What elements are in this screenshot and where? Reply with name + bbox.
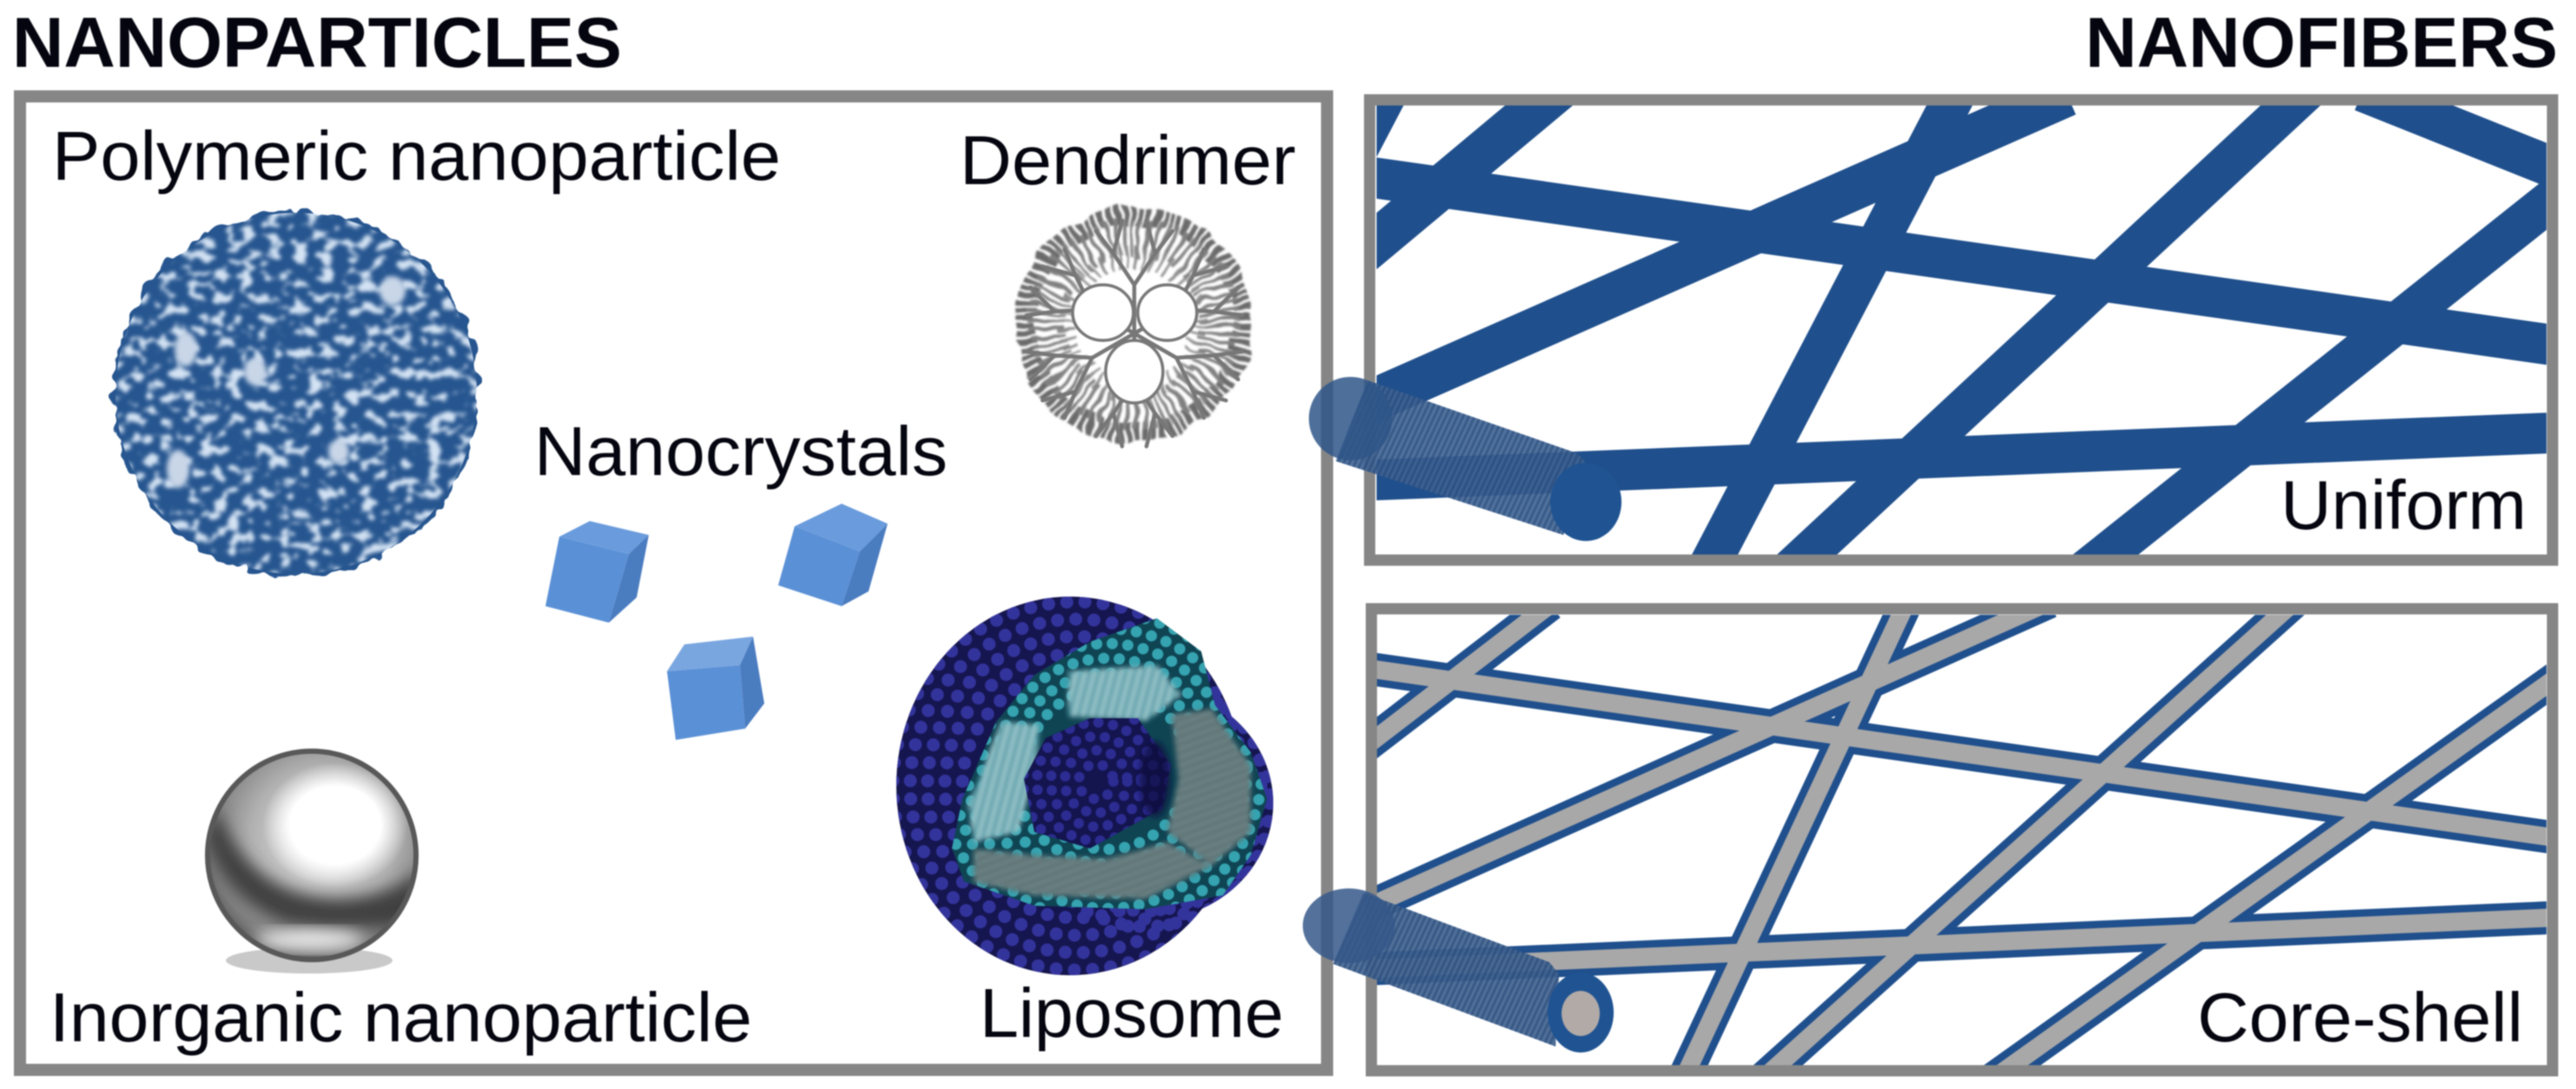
label: uniform: Uniform xyxy=(2281,466,2526,544)
label: dendrimer: Dendrimer xyxy=(960,122,1296,199)
label: inorganic nanoparticle: Inorganic nanoparticle xyxy=(50,979,752,1056)
fiber mesh: core-shell core xyxy=(1376,614,2547,1066)
icon: nanocrystal cube 2 xyxy=(778,504,888,606)
dendrimer branch: lower right xyxy=(1115,300,1252,423)
label: core-shell: Core-shell xyxy=(2197,979,2523,1056)
icon: liposome xyxy=(886,591,1285,981)
heading: nanoparticles: NANOPARTICLES xyxy=(12,3,622,82)
dendrimer branch: top xyxy=(1096,221,1172,333)
fiber mesh: uniform xyxy=(1376,104,2547,556)
icon: polymeric nanoparticle sphere xyxy=(109,204,484,583)
dendrimer core: right lobe xyxy=(1138,285,1197,340)
icon: nanocrystal cube 1 xyxy=(545,521,649,623)
dendrimer core: left lobe xyxy=(1073,285,1133,340)
icon: nanocrystal cube 3 xyxy=(667,637,764,740)
panel: uniform nanofibers xyxy=(1364,94,2559,566)
icon: dendrimer xyxy=(1017,215,1252,446)
label: polymeric nanoparticle: Polymeric nanoparticle xyxy=(52,117,781,195)
heading: nanofibers: NANOFIBERS xyxy=(2085,3,2558,82)
dendrimer branch: upper right xyxy=(1115,244,1252,366)
callout: uniform fiber enlarged tube xyxy=(1309,377,1622,541)
panel: core-shell nanofibers xyxy=(1303,599,2576,1089)
dendrimer branch: lower left xyxy=(1017,300,1153,423)
label: nanocrystals: Nanocrystals xyxy=(534,412,948,490)
callout: core-shell fiber enlarged tube xyxy=(1303,888,1614,1053)
panel: nanoparticles xyxy=(20,96,1327,1070)
label: liposome: Liposome xyxy=(980,974,1284,1052)
dendrimer core: bottom lobe xyxy=(1106,340,1163,403)
fiber mesh: core-shell shell xyxy=(1376,614,2547,1066)
dendrimer branch: upper left xyxy=(1017,244,1153,366)
icon: inorganic nanoparticle sphere xyxy=(204,749,421,974)
dendrimer branch: bottom xyxy=(1096,333,1172,446)
